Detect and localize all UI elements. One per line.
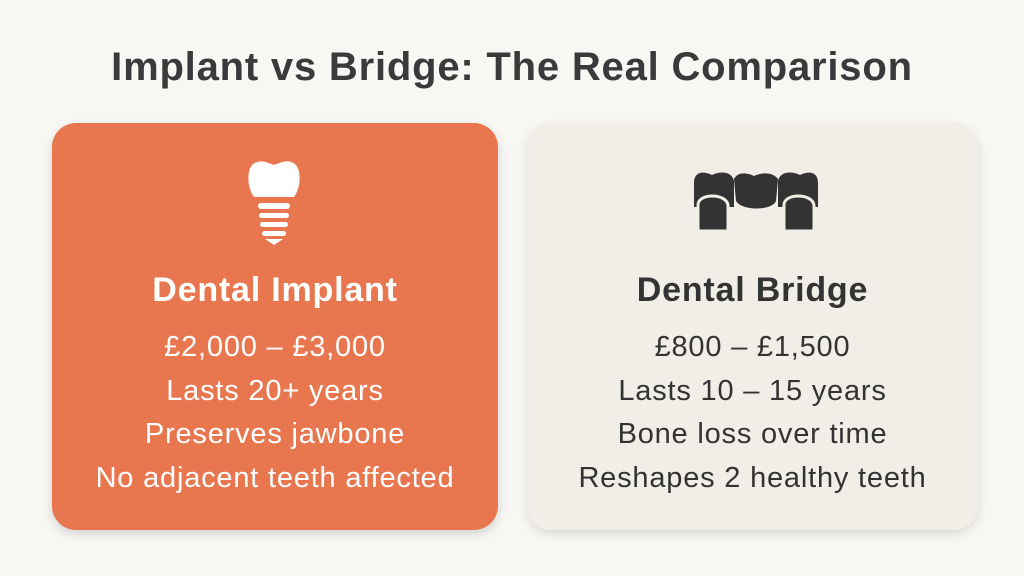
text: facts: No adjacent teeth affected: [96, 462, 454, 494]
text: facts: Preserves jawbone: [145, 418, 405, 450]
panel: dental bridge: [527, 123, 978, 530]
text: facts: £2,000 – £3,000: [164, 331, 386, 363]
title: Implant vs Bridge: The Real Comparison: [111, 45, 913, 89]
text: facts: [96, 331, 454, 494]
text: facts: £800 – £1,500: [655, 331, 850, 363]
text: facts: [578, 331, 927, 494]
text: facts: Lasts 10 – 15 years: [618, 374, 887, 406]
text: facts: Bone loss over time: [618, 418, 887, 450]
text: facts: Lasts 20+ years: [166, 374, 384, 406]
heading: Dental Implant: [152, 271, 398, 309]
icon: implant tooth: [248, 161, 300, 245]
icon: bridge: [694, 172, 818, 230]
heading: Dental Bridge: [637, 271, 868, 309]
text: facts: Reshapes 2 healthy teeth: [578, 462, 927, 494]
panel: dental implant: [52, 123, 498, 530]
